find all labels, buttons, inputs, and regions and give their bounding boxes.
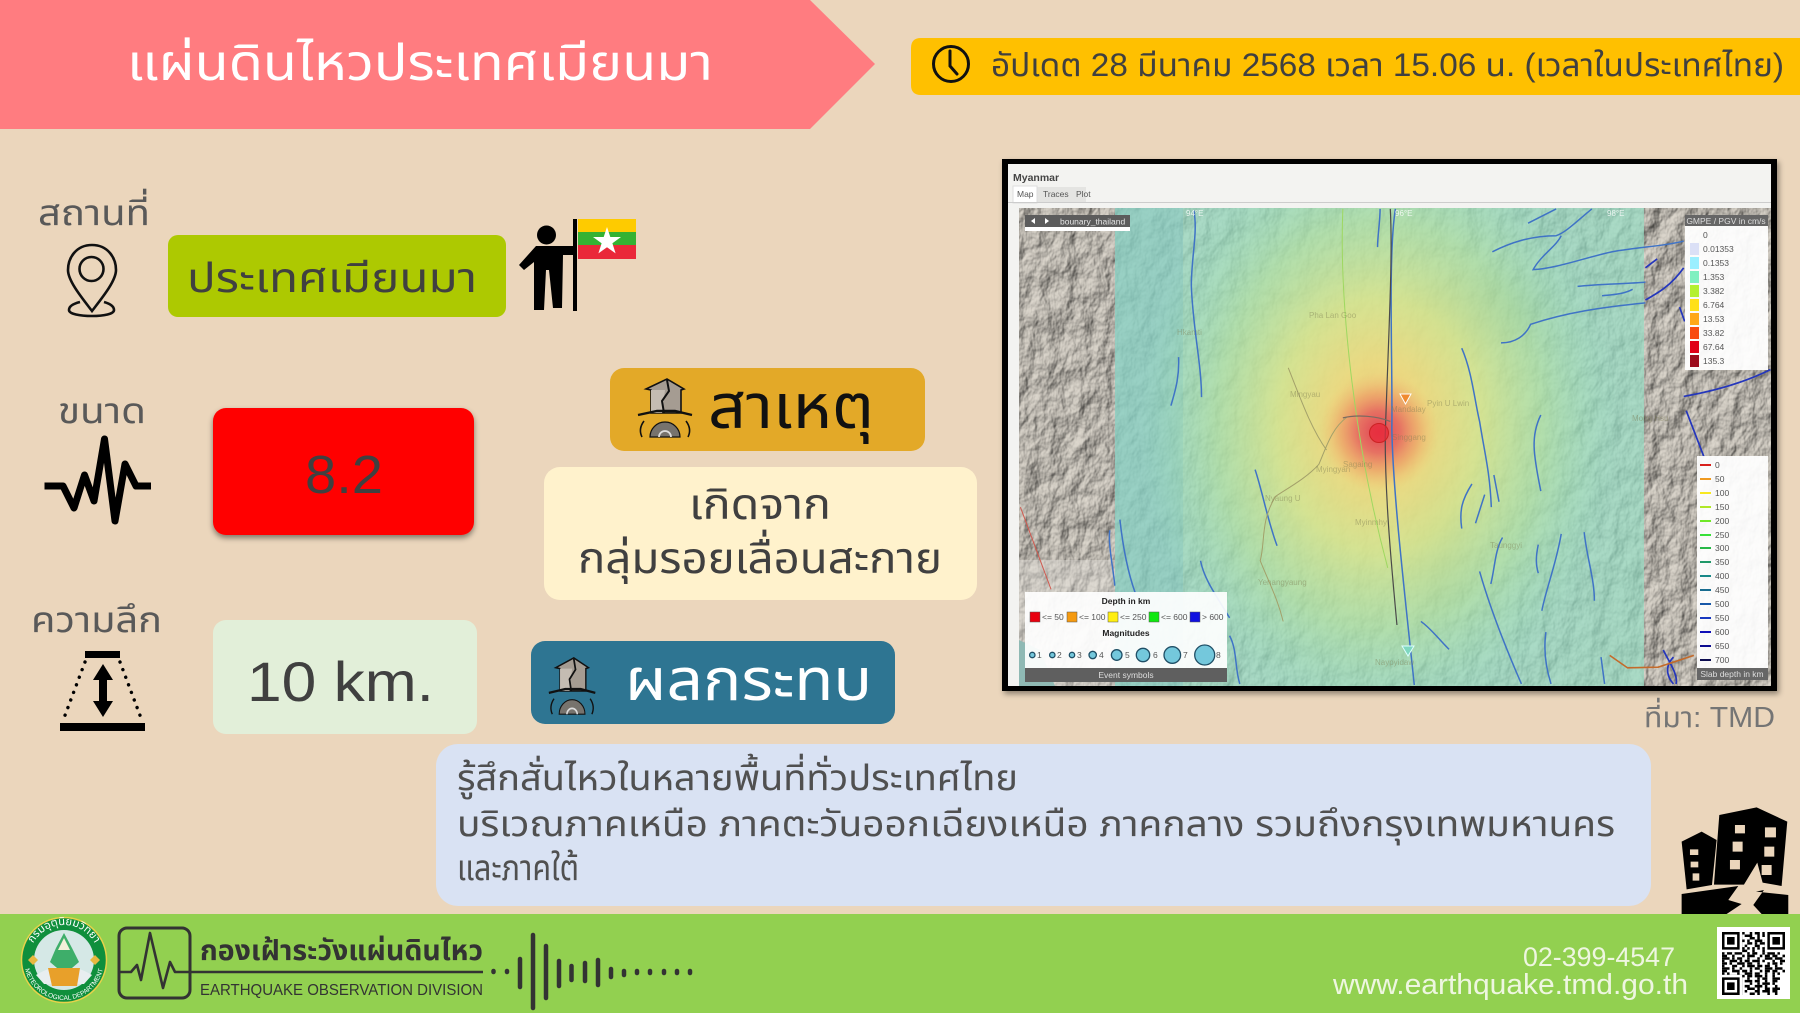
legend: slab depth: 250 (1715, 530, 1729, 540)
legend: GMPE PGV (1685, 215, 1768, 370)
panel: cause heading: สาเหตุ (708, 373, 874, 444)
legend: GMPE PGV: 135.3 (1703, 356, 1725, 366)
legend: slab depth: 650 (1715, 641, 1729, 651)
depth label: ความลึก (31, 599, 162, 640)
legend: depth and magnitude: 7 (1183, 650, 1188, 660)
legend: slab depth: Slab depth in km (1700, 669, 1764, 679)
layer control: bounary_thailand (1060, 216, 1125, 226)
icon: clock (934, 46, 968, 82)
map place labels: 98°E (1607, 209, 1624, 218)
map place labels: Pha Lan Goo (1309, 311, 1357, 320)
map place labels: Yenangyaung (1258, 578, 1307, 587)
map tabs (1008, 186, 1771, 203)
map place labels: Mandalay (1391, 405, 1426, 414)
legend: GMPE PGV: 6.764 (1703, 300, 1725, 310)
legend: slab depth: 600 (1715, 627, 1729, 637)
map place labels: Taunggyi (1490, 541, 1522, 550)
map place labels: Mingyau (1290, 390, 1320, 399)
title banner (0, 0, 875, 129)
panel: depth (31, 599, 477, 734)
legend: slab depth: 300 (1715, 543, 1729, 553)
logo: meteorological department seal: กรมอุตุนิยมวิทยา (29, 917, 99, 943)
logo: meteorological department seal: METEOROLOGICAL DEPARTMENT (25, 968, 102, 1000)
legend: depth and magnitude: <= 50 (1042, 612, 1064, 622)
map place labels: Myingyan (1316, 465, 1350, 474)
map window title: Myanmar (1013, 172, 1059, 184)
source credit: ที่มา: TMD (1644, 697, 1775, 734)
contact website: www.earthquake.tmd.go.th (1332, 969, 1688, 1001)
footer band (0, 914, 1800, 1013)
panel: magnitude: 8.2 (305, 445, 383, 505)
icon: waveform (494, 935, 690, 1008)
panel: impact heading: ผลกระทบ (625, 648, 872, 713)
map place labels: Naypyidaw (1375, 658, 1414, 667)
panel: impact body: รู้สึกสั่นไหวในหลายพื้นที่ทั่วประเทศไทย (457, 753, 1018, 799)
panel: location (38, 188, 636, 317)
map place labels: Singgang (1392, 433, 1426, 442)
location label: สถานที่ (38, 188, 150, 233)
legend: GMPE PGV: 33.82 (1703, 328, 1725, 338)
panel: impact body (436, 744, 1651, 906)
panel: magnitude (44, 390, 474, 535)
icon: person with flag (519, 219, 636, 311)
panel: cause body: เกิดจาก (689, 481, 831, 529)
legend: slab depth: 550 (1715, 613, 1729, 623)
legend: GMPE PGV: GMPE / PGV in cm/s (1686, 216, 1766, 226)
legend: slab depth: 0 (1715, 460, 1720, 470)
map tabs: Traces (1043, 189, 1069, 199)
legend: slab depth: 100 (1715, 488, 1729, 498)
panel: impact body: บริเวณภาคเหนือ ภาคตะวันออกเฉียงเหนือ ภาคกลาง รวมถึงกรุงเทพมหานคร (457, 803, 1615, 845)
magnitude value box (213, 408, 474, 535)
update time bar (911, 38, 1800, 95)
map place labels: 96°E (1395, 209, 1412, 218)
logo: earthquake observation division (119, 928, 483, 999)
earthquake epicentre marker (1370, 424, 1388, 442)
panel: cause body: กลุ่มรอยเลื่อนสะกาย (578, 529, 942, 584)
panel: cause body (544, 467, 977, 600)
legend: GMPE PGV: 0.1353 (1703, 258, 1729, 268)
title banner: แผ่นดินไหวประเทศเมียนมา (127, 35, 713, 91)
map place labels: Hkamti (1177, 328, 1202, 337)
legend: GMPE PGV: 13.53 (1703, 314, 1725, 324)
logo: meteorological department seal (20, 916, 108, 1004)
logo: earthquake observation division: กองเฝ้าระวังแผ่นดินไหว (200, 935, 483, 966)
legend: depth and magnitude (1025, 592, 1227, 682)
map place labels: Nyaung U (1265, 494, 1301, 503)
legend: depth and magnitude: 8 (1216, 650, 1221, 660)
shake map (1019, 208, 1771, 686)
legend: slab depth: 500 (1715, 599, 1729, 609)
map tabs: Map (1017, 189, 1034, 199)
panel: location: ประเทศเมียนมา (187, 255, 477, 301)
fault lines (1020, 208, 1771, 686)
legend: depth and magnitude: <= 600 (1161, 612, 1188, 622)
legend: depth and magnitude: 3 (1077, 650, 1082, 660)
legend: depth and magnitude: 1 (1037, 650, 1042, 660)
map place labels: Sagaing (1343, 460, 1372, 469)
map place labels: 94°E (1186, 209, 1203, 218)
panel: impact heading (531, 641, 895, 724)
panel: cause heading (610, 368, 925, 451)
map place labels: Pyin U Lwin (1427, 399, 1469, 408)
contact phone: 02-399-4547 (1523, 942, 1675, 972)
legend: depth and magnitude: > 600 (1202, 612, 1224, 622)
legend: GMPE PGV: 67.64 (1703, 342, 1725, 352)
legend: depth and magnitude: Magnitudes (1102, 628, 1150, 638)
legend: GMPE PGV: 0.01353 (1703, 244, 1734, 254)
legend: slab depth: 400 (1715, 571, 1729, 581)
legend: slab depth: 350 (1715, 557, 1729, 567)
layer control (1025, 215, 1130, 231)
legend: depth and magnitude: Depth in km (1102, 596, 1151, 606)
legend: GMPE PGV: 0 (1703, 230, 1708, 240)
icon: cracked house (638, 379, 692, 437)
logo: earthquake observation division: EARTHQUAKE OBSERVATION DIVISION (200, 982, 483, 999)
legend: slab depth: 450 (1715, 585, 1729, 595)
legend: GMPE PGV: 3.382 (1703, 286, 1725, 296)
icon: cracked house (549, 658, 595, 714)
icon: collapsed buildings (1682, 807, 1788, 914)
icon: depth arrow (60, 651, 145, 731)
legend: depth and magnitude: 4 (1099, 650, 1104, 660)
icon: map pin (68, 245, 116, 316)
legend: depth and magnitude: Event symbols (1098, 670, 1154, 680)
panel: impact body: และภาคใต้ (457, 847, 579, 888)
legend: depth and magnitude: 6 (1153, 650, 1158, 660)
legend: slab depth: 150 (1715, 502, 1729, 512)
legend: depth and magnitude: <= 100 (1079, 612, 1106, 622)
panel: depth: 10 km. (247, 650, 434, 713)
legend: depth and magnitude: <= 250 (1120, 612, 1147, 622)
icon: seismic wave (44, 439, 151, 521)
location value box (168, 235, 506, 317)
legend: depth and magnitude: 2 (1057, 650, 1062, 660)
map tabs: Plot (1076, 189, 1091, 199)
legend: depth and magnitude: 5 (1125, 650, 1130, 660)
magnitude label: ขนาด (58, 390, 146, 431)
map place labels: Myinmhy (1355, 518, 1387, 527)
map place labels: Mong Hsu (1632, 414, 1668, 423)
QR code (1717, 927, 1790, 999)
legend: slab depth: 50 (1715, 474, 1725, 484)
update time bar: อัปเดต 28 มีนาคม 2568 เวลา 15.06 น. (เวลาในประเทศไทย) (991, 47, 1784, 83)
map place labels (1177, 209, 1668, 667)
legend: slab depth: 700 (1715, 655, 1729, 665)
legend: slab depth: 200 (1715, 516, 1729, 526)
station markers (1400, 394, 1414, 656)
legend: slab depth (1697, 456, 1768, 680)
depth value box (213, 620, 477, 734)
map screenshot (1002, 125, 1777, 725)
legend: GMPE PGV: 1.353 (1703, 272, 1725, 282)
